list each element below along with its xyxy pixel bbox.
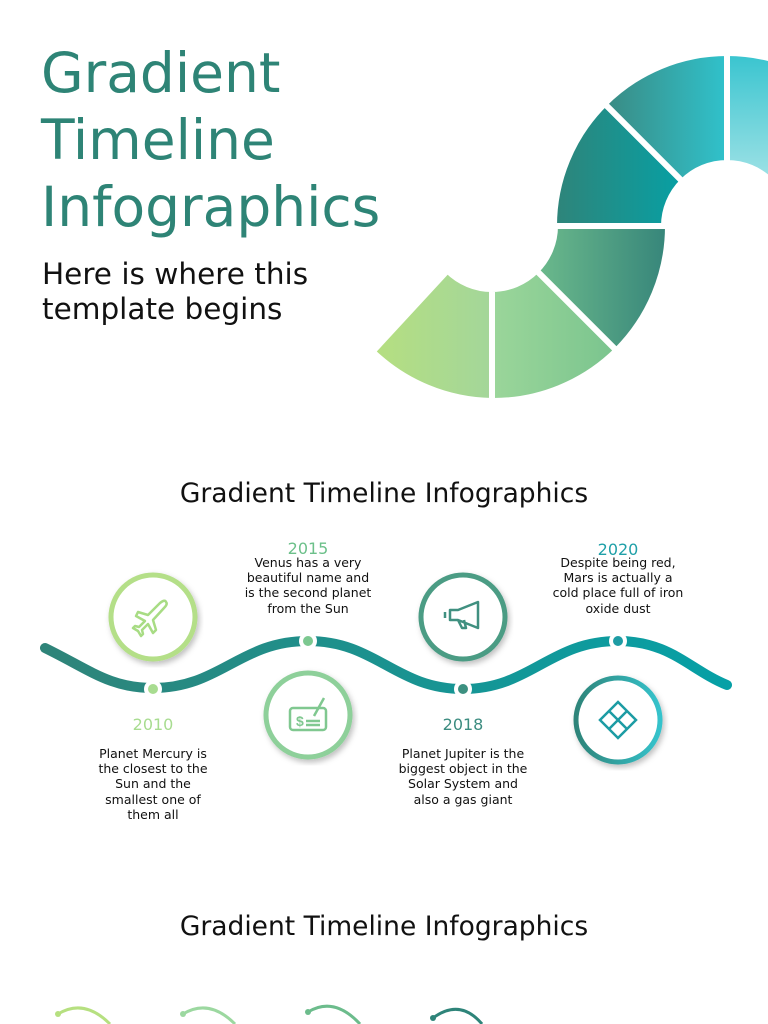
year 2010: 2010 bbox=[133, 715, 173, 734]
icon: puzzle bbox=[576, 678, 660, 762]
title: Timeline bbox=[41, 108, 275, 172]
subtitle: template begins bbox=[42, 292, 282, 326]
subtitle: Here is where this bbox=[42, 257, 308, 291]
wave line bbox=[45, 641, 727, 689]
section heading 2: Gradient Timeline Infographics bbox=[180, 911, 588, 942]
timeline bbox=[40, 572, 732, 770]
text 2018: Planet Jupiter is the biggest object in the Solar System and also a gas giant bbox=[399, 746, 527, 807]
icon: megaphone bbox=[421, 575, 505, 659]
node dots bbox=[144, 632, 627, 698]
year 2018: 2018 bbox=[443, 715, 483, 734]
section heading 1: Gradient Timeline Infographics bbox=[180, 478, 588, 509]
year 2015: 2015 bbox=[288, 539, 328, 558]
text 2020: Despite being red, Mars is actually a cold place full of iron oxide dust bbox=[553, 555, 683, 616]
title bbox=[40, 41, 380, 239]
year 2020: 2020 bbox=[598, 540, 638, 559]
title: Infographics bbox=[41, 175, 380, 239]
icon: check: $ bbox=[296, 713, 304, 729]
text 2010: Planet Mercury is the closest to the Sun and the smallest one of them all bbox=[98, 746, 208, 822]
ring graphic bbox=[376, 56, 768, 398]
title: Gradient bbox=[41, 41, 280, 105]
subtitle bbox=[42, 257, 308, 326]
icon: check bbox=[266, 673, 350, 757]
icon: plane bbox=[111, 575, 195, 659]
text 2015: Venus has a very beautiful name and is the second planet from the Sun bbox=[245, 555, 371, 616]
bottom arcs bbox=[55, 1004, 484, 1024]
